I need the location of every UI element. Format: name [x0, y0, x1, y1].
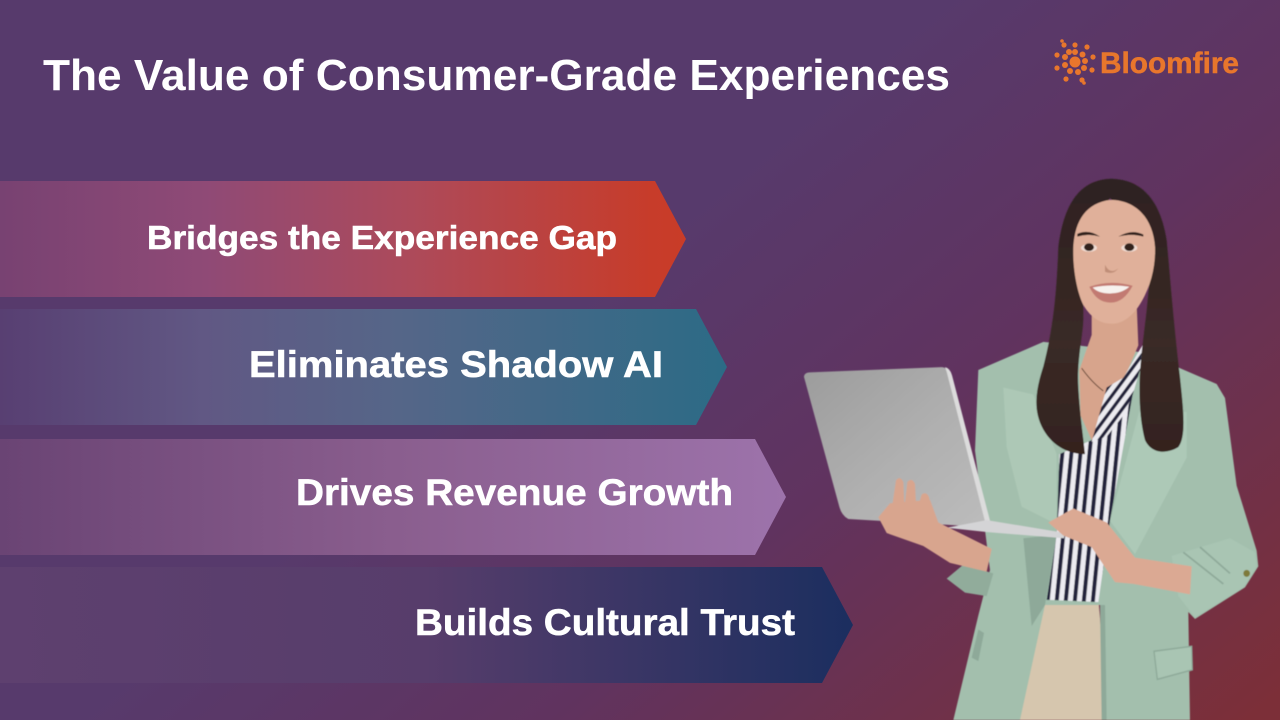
- right hand on laptop: [1048, 508, 1192, 594]
- arrow bar: Drives Revenue Growth: [0, 439, 786, 555]
- pants: [1017, 598, 1108, 720]
- logo: Bloomfire: [1054, 39, 1239, 85]
- arrow bar: Builds Cultural Trust: Builds Cultural Trust: [415, 602, 795, 643]
- hair: [1036, 179, 1184, 454]
- necklace: [1082, 368, 1103, 391]
- icon: bloom burst: [1054, 39, 1096, 85]
- face: [1073, 200, 1155, 324]
- arrow bar: Bridges the Experience Gap: [0, 181, 686, 297]
- laptop: [804, 367, 1065, 538]
- shirt collar: [1092, 345, 1142, 442]
- logo wordmark: Bloomfire: [1100, 47, 1239, 80]
- neck and chest: [1079, 303, 1138, 440]
- nose: [1105, 265, 1118, 273]
- striped shirt: [1047, 391, 1133, 602]
- arrow bar: Bridges the Experience Gap: Bridges the Experience Gap: [147, 220, 617, 257]
- arrow bar: Eliminates Shadow AI: Eliminates Shadow AI: [249, 344, 663, 385]
- illustration: woman holding a laptop: [804, 179, 1258, 720]
- arrow bar: Eliminates Shadow AI: [0, 309, 727, 425]
- title: The Value of Consumer-Grade Experiences: [43, 51, 950, 100]
- arrow bar: Builds Cultural Trust: [0, 567, 853, 683]
- arrow bar: Drives Revenue Growth: Drives Revenue Growth: [296, 472, 733, 513]
- eyebrows: [1077, 232, 1143, 237]
- eyes: [1081, 244, 1097, 252]
- left hand under laptop: [878, 478, 992, 572]
- smile: [1089, 283, 1133, 303]
- jacket: [947, 342, 1258, 720]
